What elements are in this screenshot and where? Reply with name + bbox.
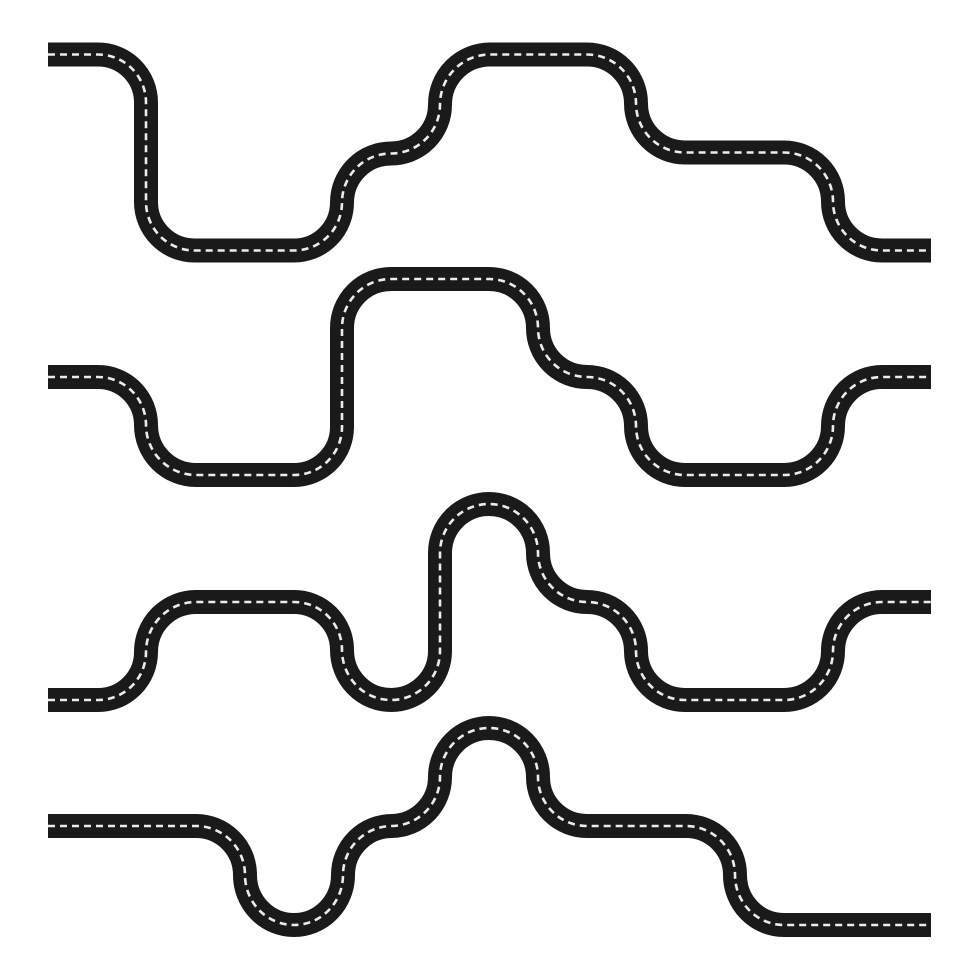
road 3: [48, 504, 931, 700]
road 2: [48, 279, 931, 475]
road 4: [48, 728, 931, 925]
road 1: [48, 54, 931, 250]
